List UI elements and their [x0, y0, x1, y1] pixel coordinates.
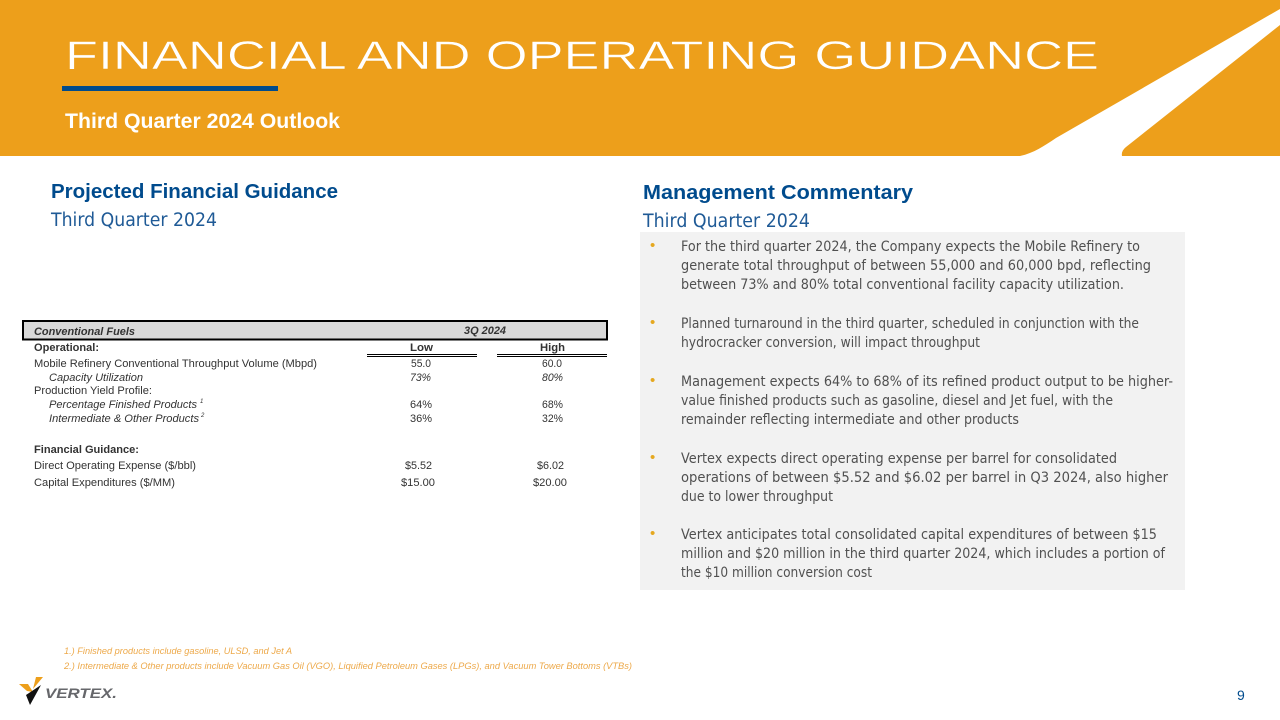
row: direct operating expense	[34, 460, 564, 472]
row: percentage finished products: 1	[200, 399, 203, 405]
footnotes: 1.) Finished products include gasoline, ULSD, and Jet A	[64, 646, 292, 656]
heading: management commentary	[642, 182, 914, 232]
title underline	[62, 86, 278, 91]
bullet: turnaround: hydrocracker conversion, will impact throughput	[681, 335, 980, 351]
row: capacity utilization: 73%	[410, 372, 431, 384]
row: capital expenditures: $15.00	[401, 477, 435, 489]
row: production yield profile: Production Yield Profile:	[34, 385, 152, 397]
table: conventional fuels guidance	[23, 321, 607, 489]
row: intermediate and other products: 32%	[542, 413, 563, 425]
bullet: turnaround: •	[650, 314, 655, 331]
row: intermediate and other products: Intermediate & Other Products	[49, 413, 199, 425]
heading: projected financial guidance	[50, 181, 338, 231]
row: capacity utilization: 80%	[542, 372, 563, 384]
bullet: product output	[650, 372, 1173, 428]
row: capacity utilization	[49, 372, 563, 384]
row: throughput	[34, 358, 562, 370]
row: percentage finished products	[49, 399, 563, 411]
row: intermediate and other products: 36%	[410, 413, 432, 425]
row: throughput: Mobile Refinery Conventional Throughput Volume (Mbpd)	[34, 358, 317, 370]
heading: management commentary: Management Commentary	[643, 182, 914, 204]
bullet: operating expense: •	[650, 449, 655, 466]
bullet: capital expenditures: million and $20 million in the third quarter 2024, which includes a portion of	[681, 546, 1166, 562]
footnotes	[63, 646, 632, 671]
row: capital expenditures: $20.00	[533, 477, 567, 489]
bullet: product output: Management expects 64% to 68% of its refined product output to be higher-	[681, 374, 1173, 390]
heading: projected financial guidance: Projected Financial Guidance	[51, 181, 338, 203]
table header: 3Q 2024	[464, 325, 506, 337]
heading: projected financial guidance: Third Quarter 2024	[50, 210, 217, 231]
bullet: product output: value finished products such as gasoline, diesel and Jet fuel, with the	[681, 393, 1113, 409]
row: capital expenditures	[34, 477, 567, 489]
table header: Conventional Fuels	[34, 326, 135, 338]
footnotes: 2.) Intermediate & Other products include Vacuum Gas Oil (VGO), Liquified Petroleum Gases (LPGs), and Vacuum Tower Bottoms (VTBs)	[63, 661, 632, 671]
bullet: capital expenditures: the $10 million conversion cost	[681, 565, 872, 581]
row: capital expenditures: Capital Expenditures ($/MM)	[34, 477, 175, 489]
bullet: turnaround: Planned turnaround in the third quarter, scheduled in conjunction with the	[681, 316, 1139, 332]
bullet: operating expense: operations of between $5.52 and $6.02 per barrel in Q3 2024, also higher	[681, 470, 1168, 486]
operational header row: Low	[410, 342, 433, 354]
row: percentage finished products: Percentage Finished Products	[49, 399, 197, 411]
table header	[23, 321, 607, 340]
row: direct operating expense: $5.52	[405, 460, 432, 472]
heading: management commentary: Third Quarter 2024	[642, 211, 810, 232]
bullet: operating expense: due to lower throughput	[681, 489, 833, 505]
header band	[0, 0, 1280, 156]
bullet: throughput: generate total throughput of between 55,000 and 60,000 bpd, reflecting	[681, 258, 1151, 274]
bullet: throughput: For the third quarter 2024, the Company expects the Mobile Refinery to	[681, 239, 1140, 255]
subtitle: Third Quarter 2024 Outlook	[65, 110, 340, 133]
operational header row: High	[540, 342, 565, 354]
bullet: capital expenditures: Vertex anticipates total consolidated capital expenditures of between $15	[681, 527, 1157, 543]
row: throughput: 55.0	[411, 358, 431, 370]
row: direct operating expense: $6.02	[537, 460, 564, 472]
logo: vertex: VERTEX.	[45, 685, 117, 701]
row: capacity utilization: Capacity Utilization	[49, 372, 143, 384]
bullet: capital expenditures	[650, 525, 1166, 581]
bullet: operating expense	[650, 449, 1168, 505]
bullet: throughput: between 73% and 80% total conventional facility capacity utilization.	[681, 277, 1124, 293]
logo: vertex	[19, 677, 117, 705]
row: direct operating expense: Direct Operating Expense ($/bbl)	[34, 460, 196, 472]
financial guidance heading: Financial Guidance:	[34, 444, 139, 456]
bullet: throughput: •	[650, 237, 655, 254]
row: intermediate and other products	[49, 413, 563, 425]
bullet: throughput	[650, 237, 1151, 293]
row: throughput: 60.0	[542, 358, 562, 370]
bullet: operating expense: Vertex expects direct operating expense per barrel for consolidated	[681, 451, 1117, 467]
row: percentage finished products: 68%	[542, 399, 563, 411]
operational header row: Operational:	[34, 342, 99, 354]
bullet: turnaround	[650, 314, 1139, 351]
panel: commentary	[640, 232, 1185, 590]
bullet: product output: •	[650, 372, 655, 389]
bullet: product output: remainder reflecting intermediate and other products	[681, 412, 1019, 428]
bullet: capital expenditures: •	[650, 525, 655, 542]
title: FINANCIAL AND OPERATING GUIDANCE	[65, 34, 1099, 78]
page number: 9	[1237, 687, 1245, 703]
row: percentage finished products: 64%	[410, 399, 432, 411]
row: intermediate and other products: 2	[200, 413, 205, 419]
operational header row	[34, 342, 607, 356]
